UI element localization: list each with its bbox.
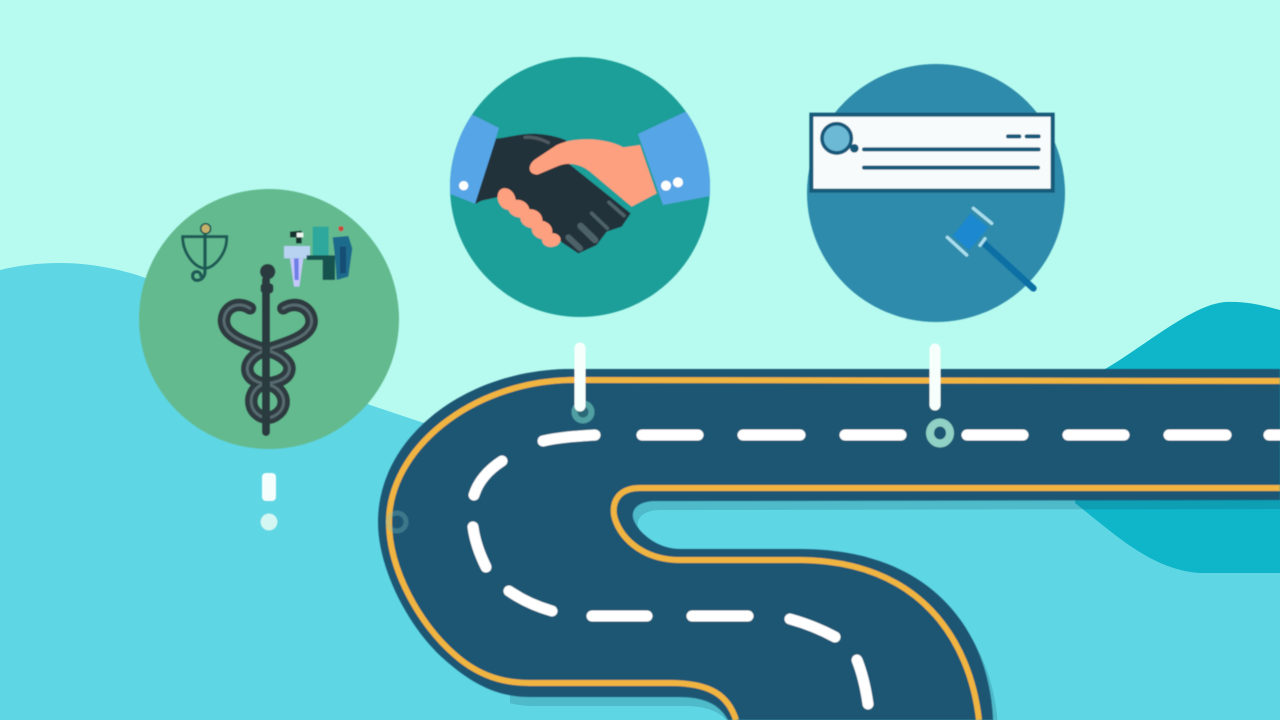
road shadow: [510, 500, 1280, 720]
milestone marker: medicine connector: [260, 473, 278, 530]
icon: seal: [822, 124, 851, 153]
milestone marker: left road ring: [388, 513, 406, 531]
upper right background cover: [430, 300, 1280, 425]
left sleeve: [445, 115, 499, 204]
milestone marker: handshake connector: [574, 348, 592, 420]
icon: dark hand: [475, 134, 631, 253]
road edge line inner: [614, 488, 1280, 720]
icon: medical equipment: [284, 226, 352, 287]
right teal hill: [1075, 302, 1280, 573]
document card: [811, 115, 1053, 191]
document lines: [864, 136, 1039, 168]
road edge line outer: [389, 380, 1280, 720]
glove highlights: [525, 137, 624, 248]
icon: gavel: [947, 208, 1033, 288]
icon: fingers: [494, 185, 561, 248]
road: [378, 369, 1280, 720]
icon: peach hand: [530, 139, 657, 207]
panel: handshake circle: [445, 57, 715, 317]
right sleeve: [638, 112, 715, 205]
panel: legal circle: [807, 64, 1065, 322]
road centre dashes: [473, 435, 1280, 704]
left cyan hill: [0, 263, 1280, 720]
icon: stethoscope: [183, 224, 227, 280]
panel: medicine circle: [139, 189, 399, 449]
icon: cuff buttons: [459, 177, 683, 191]
icon: caduceus: [224, 264, 312, 432]
milestone marker: legal connector: [930, 349, 950, 444]
